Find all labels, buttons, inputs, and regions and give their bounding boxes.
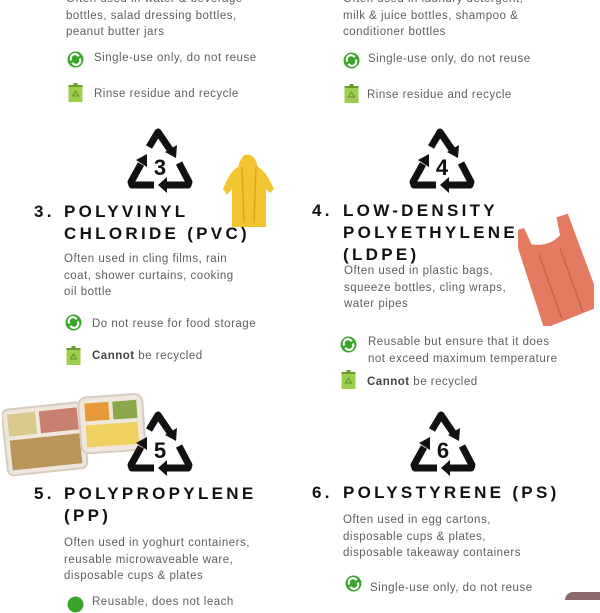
heading: PVC: 3. (34, 202, 55, 221)
icon: recycle 6: 6 (437, 438, 449, 463)
heading: PS: POLYSTYRENE (PS) (343, 483, 560, 502)
text: PS uses: disposable takeaway containers (343, 547, 521, 559)
text: LDPE uses: squeeze bottles, cling wraps, (344, 282, 506, 294)
text: PET recycle: Rinse residue and recycle (94, 88, 239, 100)
icon: bin LDPE (342, 370, 356, 389)
heading: PVC: POLYVINYL (64, 202, 188, 221)
heading: PP (34, 484, 256, 525)
text: PP uses: reusable microwaveable ware, (64, 554, 233, 566)
text: PET reuse: Single-use only, do not reuse (94, 52, 257, 64)
icon: recycle 3: 3 (154, 155, 166, 180)
icon: reuse PVC (66, 314, 82, 330)
image: raincoat (223, 154, 274, 227)
heading: PVC (34, 202, 250, 243)
text: LDPE reuse: not exceed maximum temperature (368, 352, 558, 364)
text: PP uses (64, 537, 250, 582)
icon: recycle 4 (410, 128, 474, 193)
image: plastic bag (518, 214, 594, 326)
heading: PVC: CHLORIDE (PVC) (64, 224, 250, 243)
heading: LDPE: POLYETHYLENE (343, 223, 518, 242)
heading: LDPE: 4. (312, 201, 333, 220)
text: PP reuse: Reusable, does not leach (92, 596, 234, 608)
text: PET uses (66, 0, 243, 38)
text: HDPE uses: milk & juice bottles, shampoo & (343, 10, 518, 22)
icon: reuse LDPE (340, 336, 356, 352)
text: PP uses: disposable cups & plates (64, 570, 203, 582)
text: LDPE uses: Often used in plastic bags, (344, 265, 493, 277)
icon: reuse PS (346, 576, 362, 592)
text: PVC recycle: Cannot be recycled (92, 350, 203, 362)
text: HDPE recycle: Rinse residue and recycle (367, 89, 512, 101)
text: HDPE reuse: Single-use only, do not reuse (368, 53, 531, 65)
icon: recycle 6 (410, 412, 476, 476)
icon: recycle 4: 4 (436, 155, 449, 180)
icon: bin PET (68, 83, 82, 102)
text: PS uses: disposable cups & plates, (343, 530, 486, 542)
icon: bin HDPE (344, 84, 358, 103)
text: LDPE reuse (368, 336, 558, 364)
icon: reuse PP (68, 596, 84, 612)
text: PVC uses: coat, shower curtains, cooking (64, 270, 234, 282)
image: lunch boxes (2, 393, 146, 476)
heading: PP: (PP) (64, 506, 111, 525)
heading: LDPE: LOW-DENSITY (343, 201, 498, 220)
text: PP uses: Often used in yoghurt containers, (64, 537, 250, 549)
text: LDPE uses (344, 265, 506, 310)
text: PVC uses: Often used in cling films, rain (64, 253, 227, 265)
icon: recycle 5 (128, 412, 192, 476)
heading: LDPE: (LDPE) (343, 245, 419, 264)
icon: reuse PET (68, 52, 84, 68)
image: cup edge (565, 592, 600, 600)
icon: bin PVC (66, 346, 80, 365)
icon: reuse HDPE (344, 52, 360, 68)
heading: PP: POLYPROPYLENE (64, 484, 256, 503)
text: PS uses: Often used in egg cartons, (343, 514, 491, 526)
text: PS uses (343, 514, 521, 559)
text: LDPE recycle: Cannot be recycled (367, 376, 478, 388)
text: PS reuse: Single-use only, do not reuse (370, 582, 533, 594)
text: PVC reuse: Do not reuse for food storage (92, 318, 256, 330)
text: PVC uses (64, 253, 234, 298)
heading: PS: 6. (312, 483, 333, 502)
text: HDPE uses: conditioner bottles (343, 26, 446, 38)
icon: recycle 5: 5 (154, 438, 166, 463)
text: HDPE uses (343, 0, 523, 38)
text: PVC uses: oil bottle (64, 286, 112, 298)
text: LDPE uses: water pipes (344, 298, 408, 310)
text: PET uses: bottles, salad dressing bottles, (66, 10, 237, 22)
heading: PP: 5. (34, 484, 55, 503)
text: PET uses: peanut butter jars (66, 26, 165, 38)
text: LDPE reuse: Reusable but ensure that it does (368, 336, 550, 348)
icon: recycle 3 (128, 128, 192, 193)
heading: LDPE (312, 201, 518, 264)
